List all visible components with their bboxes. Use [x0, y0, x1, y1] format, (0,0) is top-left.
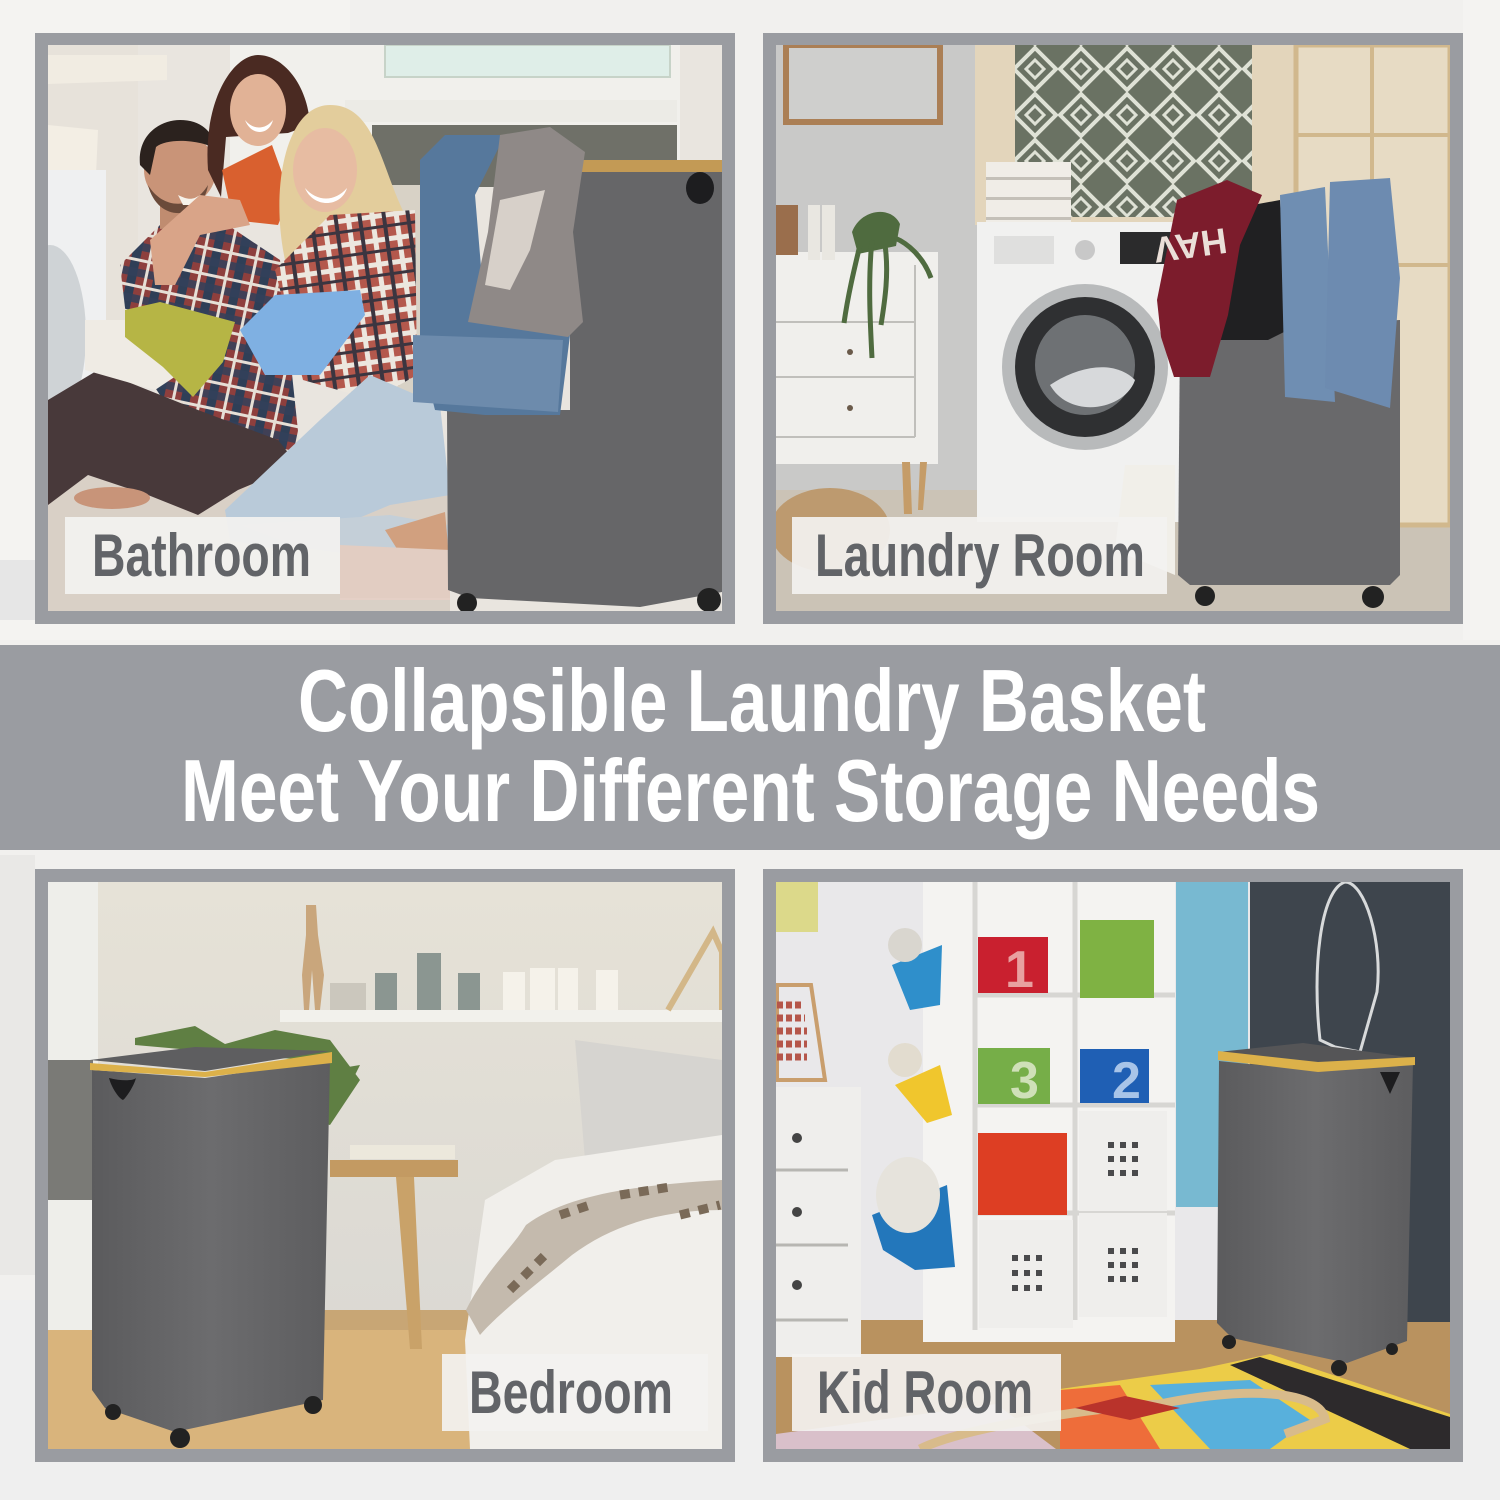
storage boxes: 1 [1005, 941, 1034, 999]
burgundy hoodie [1151, 180, 1262, 377]
rug [776, 1354, 1450, 1449]
candles [503, 968, 618, 1010]
panel: laundry room [763, 33, 1463, 624]
bamboo lid [90, 1047, 330, 1071]
scene: kid room photo [776, 882, 1450, 1449]
shelving unit [923, 882, 1175, 1342]
panel frame: bathroom [35, 33, 735, 624]
scene: bedroom photo [48, 882, 722, 1449]
black garment [1220, 200, 1284, 340]
scene: bathroom photo [14, 45, 722, 613]
dresser [776, 252, 938, 464]
bamboo rim [582, 160, 722, 172]
hanging towels [420, 135, 570, 415]
white drawers [776, 1320, 861, 1357]
scene: laundry room photo [770, 45, 1450, 611]
woman [279, 105, 405, 260]
blue towels [1280, 187, 1335, 402]
triangle frame [668, 932, 722, 1010]
label: Kid Room: Kid Room [817, 1359, 1033, 1426]
heading: line one: Collapsible Laundry Basket [298, 651, 1206, 750]
vent dots [1012, 1142, 1138, 1291]
storage boxes: 3 [1010, 1052, 1039, 1110]
panel frame: kid room [763, 869, 1463, 1462]
bed [575, 1040, 722, 1160]
washing machine [977, 222, 1180, 522]
hamper body [92, 1060, 330, 1432]
panel: kid room [763, 869, 1463, 1462]
panel: bathroom [14, 33, 735, 624]
jeans and legs [225, 375, 448, 518]
plant [844, 212, 931, 358]
plant [135, 1026, 360, 1125]
hamper body [447, 172, 722, 607]
abacus [777, 985, 825, 1080]
panel frame: bedroom [35, 869, 735, 1462]
wooden figure [302, 905, 324, 1010]
girl [207, 55, 310, 197]
label: Laundry Room: Laundry Room [815, 522, 1145, 589]
man [120, 225, 298, 450]
held towels [85, 320, 174, 390]
wall toys [872, 928, 955, 1270]
towels on washer [986, 162, 1071, 222]
white cloth and basket [1167, 522, 1175, 575]
hamper [1217, 1043, 1415, 1376]
pouf [776, 488, 887, 562]
burgundy hoodie: HAV [1151, 220, 1230, 271]
panel frame: laundry room [763, 33, 1463, 624]
storage boxes: 2 [1112, 1052, 1141, 1110]
banner [0, 645, 1500, 850]
label: Bedroom: Bedroom [469, 1359, 673, 1426]
panel: bedroom [35, 869, 735, 1462]
storage boxes [978, 920, 1167, 1328]
label: Bathroom: Bathroom [92, 522, 311, 589]
hamper body [1178, 320, 1400, 585]
side table [330, 1160, 458, 1177]
